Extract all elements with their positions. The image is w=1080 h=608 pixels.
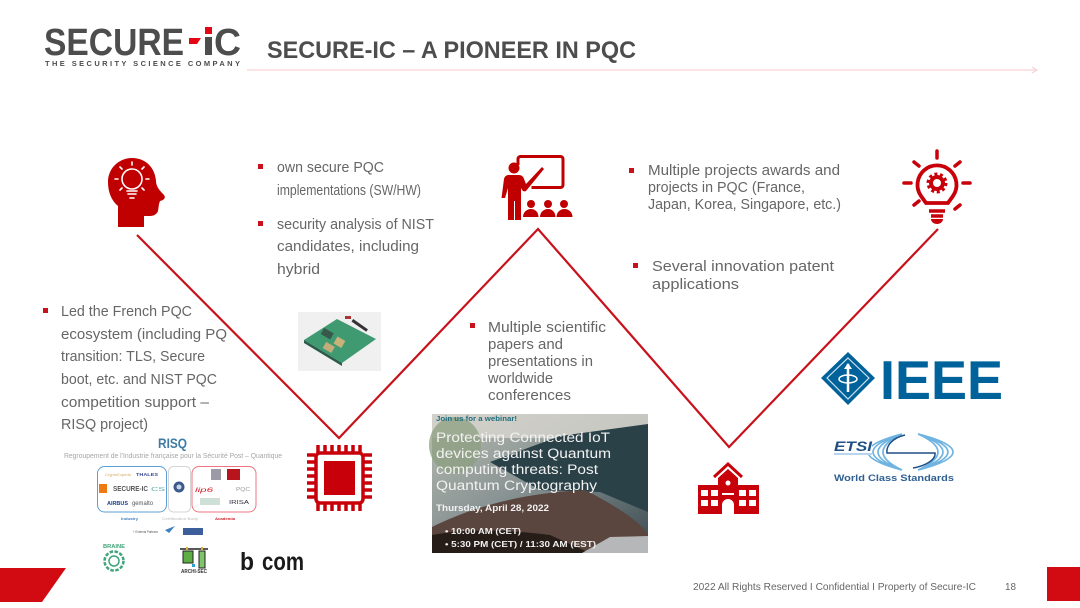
RISQ logos panel: THALES: [136, 472, 158, 477]
logo: Secure-IC: SECURE: [44, 22, 184, 64]
webinar image: devices against Quantum: [436, 446, 611, 461]
icon: microchip: [307, 445, 372, 511]
text block: RISQ ecosystem: RISQ project): [61, 416, 148, 433]
title: SECURE-IC – A PIONEER IN PQC: [267, 37, 636, 64]
text block: projects awards: projects in PQC (France,: [648, 179, 805, 196]
text block: patents: Several innovation patent: [652, 258, 835, 275]
webinar image: Protecting Connected IoT: [436, 430, 610, 445]
webinar image: Quantum Cryptography: [436, 478, 597, 493]
RISQ logos panel: IRISA: [229, 500, 250, 506]
IEEE logo: [821, 349, 1003, 411]
RISQ logos panel: Regroupement de l'Industrie française pour la Sécurité Post – Quantique: [64, 453, 282, 460]
webinar image: Thursday, April 28, 2022: [436, 503, 549, 514]
text block: implementations: [258, 159, 434, 278]
icon: head with light bulb: [108, 158, 165, 227]
webinar image: computing threats: Post: [436, 462, 598, 477]
icon: teacher and audience: [502, 156, 572, 220]
RISQ logos panel: [64, 435, 282, 535]
b-com logo: com: [262, 548, 304, 576]
title arrow rule: [247, 67, 1037, 73]
ARCHI-SEC logo: ARCHI-SEC: [181, 569, 207, 575]
text block: patents: applications: [652, 276, 739, 293]
ETSI logo: ETSI: [834, 438, 873, 454]
footer text: 2022 All Rights Reserved I Confidential I Property of Secure-IC: [693, 581, 976, 593]
text block: RISQ ecosystem: [43, 303, 227, 433]
webinar image: • 10:00 AM (CET): [445, 526, 521, 536]
footer bar right: [1047, 567, 1080, 601]
ETSI logo: [832, 434, 954, 483]
b-com logo: [240, 548, 304, 576]
RISQ logos panel: lip6: [195, 488, 214, 494]
RISQ logos panel: CryptoExperts: [105, 472, 131, 477]
logo: Secure-IC: THE SECURITY SCIENCE COMPANY: [45, 59, 240, 68]
RISQ logos panel: CS: [151, 487, 166, 493]
text block: scientific papers: papers and: [488, 336, 563, 353]
text block: implementations: own secure PQC: [277, 159, 384, 176]
webinar image: [429, 414, 648, 553]
text block: projects awards: [629, 162, 841, 213]
text block: scientific papers: worldwide: [487, 370, 553, 387]
ARCHI-SEC logo: [180, 547, 208, 575]
text block: implementations: candidates, including: [277, 238, 419, 255]
icon: school building: [698, 464, 759, 514]
text block: scientific papers: presentations in: [488, 353, 593, 370]
b-com logo: b: [240, 548, 254, 576]
RISQ logos panel: gemalto: [132, 501, 154, 507]
BRAINE logo: BRAINE: [103, 544, 125, 550]
RISQ logos panel: PQC: [236, 487, 250, 493]
text block: implementations: security analysis of NIST: [277, 216, 434, 233]
text block: projects awards: Japan, Korea, Singapore, etc.): [648, 196, 841, 213]
text block: RISQ ecosystem: competition support –: [61, 394, 210, 411]
photo: circuit board: [298, 312, 381, 371]
RISQ logos panel: + External Partners: [133, 530, 158, 534]
text block: RISQ ecosystem: Led the French PQC: [61, 303, 192, 320]
RISQ logos panel: AIRBUS: [107, 501, 129, 507]
zigzag line: [137, 229, 938, 447]
RISQ logos panel: Academia: [215, 517, 236, 521]
text block: RISQ ecosystem: transition: TLS, Secure: [61, 348, 205, 365]
text block: RISQ ecosystem: boot, etc. and NIST PQC: [61, 371, 217, 388]
RISQ logos panel: SECURE-IC: [113, 486, 148, 493]
text block: implementations: hybrid: [277, 261, 320, 278]
text block: scientific papers: [470, 319, 607, 404]
webinar image: Join us for a webinar!: [436, 414, 517, 423]
text block: RISQ ecosystem: ecosystem (including PQ: [61, 326, 227, 343]
text block: implementations: implementations (SW/HW): [277, 182, 421, 199]
footer bar left: [0, 568, 66, 602]
ETSI logo: World Class Standards: [834, 473, 954, 483]
BRAINE logo: [103, 544, 125, 570]
logo: Secure-IC: C: [214, 22, 241, 64]
RISQ logos panel: Certification Body: [162, 517, 198, 521]
icon: light bulb with gear: [904, 151, 970, 224]
webinar image: • 5:30 PM (CET) / 11:30 AM (EST): [445, 539, 596, 549]
text block: scientific papers: Multiple scientific: [488, 319, 607, 336]
RISQ logos panel: Industry: [121, 517, 138, 521]
page number: 18: [1005, 581, 1016, 593]
text block: scientific papers: conferences: [488, 387, 571, 404]
text block: patents: [633, 258, 835, 293]
text block: projects awards: Multiple projects awards and: [648, 162, 840, 179]
IEEE logo: IEEE: [880, 349, 1003, 411]
RISQ logos panel: RISQ: [158, 435, 187, 451]
